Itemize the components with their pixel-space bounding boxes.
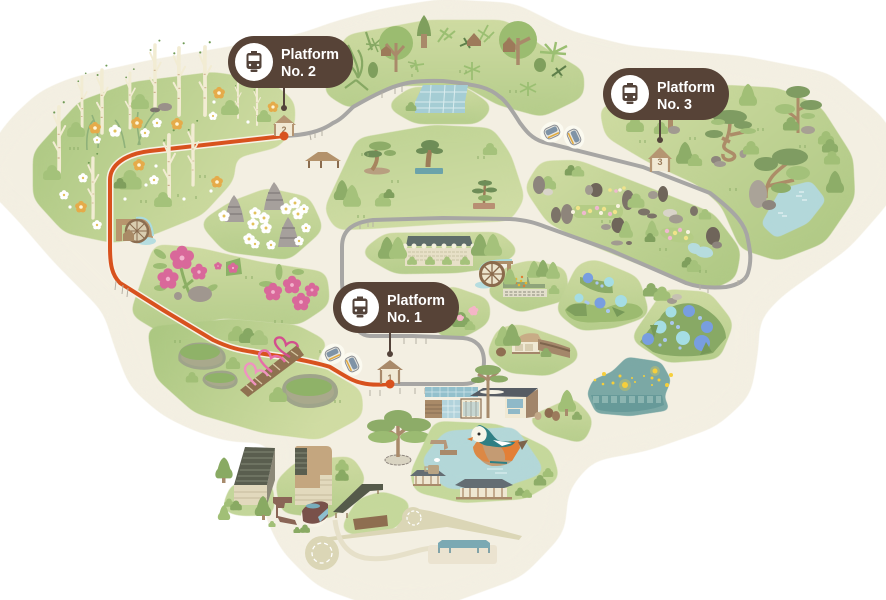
water wheel left	[116, 218, 156, 245]
pine trees	[668, 86, 822, 210]
bus stop shelter	[428, 540, 497, 564]
stone circles	[180, 344, 336, 406]
callout: Platform No. 1: No. 1	[387, 310, 422, 326]
callout: Platform No. 3	[603, 68, 729, 143]
panel: hydrangea lawn lower	[631, 290, 733, 362]
station 3	[648, 147, 672, 172]
greenhouse	[406, 85, 468, 113]
panel: building lawn right	[276, 457, 366, 518]
birch trees	[53, 40, 260, 218]
bonsai trees	[364, 140, 497, 209]
station 1: 1	[387, 373, 393, 383]
callout: Platform No. 2: Platform	[281, 47, 339, 63]
panel: hydrangea lawn upper	[556, 260, 649, 330]
entrance trees	[215, 457, 349, 533]
covered bus shelter	[333, 484, 383, 518]
panel: wall lawn	[360, 233, 520, 273]
left hall	[234, 447, 275, 505]
route markers	[280, 132, 394, 388]
panel: jar lawn	[526, 398, 593, 443]
panel: rock garden lawn	[525, 161, 740, 289]
pine pond	[761, 181, 826, 238]
panel: greenhouse lawn	[386, 88, 493, 123]
callout: Platform No. 1: Platform	[387, 293, 445, 309]
panel: building lawn left	[222, 483, 274, 515]
panel: stone circle lawn	[148, 320, 362, 439]
monorail track: grey	[284, 81, 750, 384]
tropical plants	[340, 15, 567, 96]
flower bed centre	[503, 260, 560, 297]
panel: azalea lawn	[131, 245, 329, 333]
monorail track: active orange route	[110, 136, 390, 385]
cafe building	[425, 365, 538, 418]
rock garden flower beds	[571, 186, 695, 245]
heart bridge	[240, 337, 304, 397]
panel: thatched house lawn	[487, 325, 580, 375]
station 2: 2	[281, 125, 287, 135]
azalea shrubs	[152, 246, 319, 310]
panel: firefly pond	[587, 357, 673, 416]
wooden deck	[353, 515, 388, 530]
jars and tree	[534, 390, 582, 421]
bonsai lawn bushes	[334, 143, 497, 207]
wall bushes	[378, 234, 502, 265]
track supports	[115, 86, 744, 396]
footpath	[335, 520, 435, 559]
small pavilion with coffee cup	[410, 458, 446, 486]
trains near platform 1	[318, 340, 366, 379]
pine lawn bushes	[626, 84, 844, 193]
large pavilion	[455, 468, 553, 500]
callout: Platform No. 1	[333, 282, 459, 357]
callout: Platform No. 2	[228, 36, 353, 111]
forest bushes and rocks	[43, 94, 271, 207]
callout: Platform No. 3: No. 3	[657, 97, 692, 113]
mandarin duck	[467, 425, 528, 473]
round exhibition building	[301, 501, 328, 527]
gazebo	[305, 152, 341, 168]
duck pond	[411, 422, 559, 502]
rose bushes behind platform 1	[452, 306, 478, 330]
small rock garden pond	[688, 243, 713, 258]
callout: Platform No. 2: No. 2	[281, 64, 316, 80]
hydrangea plants	[565, 273, 726, 356]
panel: birch forest lawn	[34, 73, 294, 242]
station 1	[377, 360, 403, 384]
station 2	[273, 115, 296, 136]
stone towers	[225, 182, 299, 247]
panel: tropical lawn	[324, 21, 583, 116]
water wheel centre	[475, 260, 513, 288]
panel: stone tower lawn	[200, 189, 323, 259]
panel: road lawn	[340, 492, 412, 534]
grass ticks	[70, 70, 805, 403]
hydrangea lawn bushes and rock	[643, 283, 682, 304]
rock garden stones	[533, 165, 722, 272]
thatched house	[495, 324, 570, 358]
road: visitor drive	[305, 507, 522, 570]
daffodils	[87, 112, 155, 150]
trains near platform 3	[537, 118, 588, 152]
right hall	[295, 446, 332, 505]
panel: pine lawn	[600, 86, 854, 260]
panel: water wheel lawn	[486, 261, 567, 312]
forest flowers	[59, 87, 278, 229]
panel: small lawn behind platform 1	[436, 285, 489, 336]
zigzag walkway	[273, 497, 297, 525]
stone wall with tiled roof	[402, 236, 476, 266]
callout: Platform No. 3: Platform	[657, 80, 715, 96]
station 3: 3	[657, 157, 663, 167]
lawn bushes	[186, 326, 287, 402]
white flower clusters	[218, 197, 311, 249]
panel: bonsai lawn	[325, 126, 524, 229]
big pine tree	[367, 410, 431, 465]
